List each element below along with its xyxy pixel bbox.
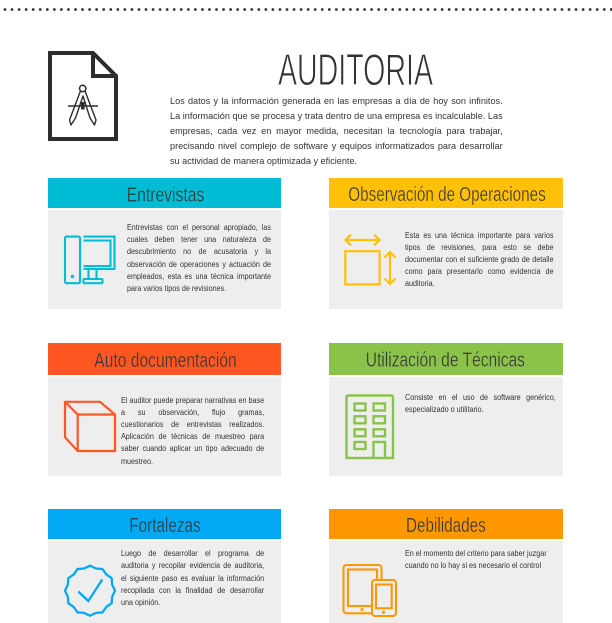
panel: Utilización de Técnicas <box>329 343 563 476</box>
intro text: precisando nivel complejo de software y equipos informatizados para desarrollar <box>170 141 503 152</box>
icon: desktop computer <box>64 236 116 284</box>
body: Utilización de Técnicas <box>329 377 563 476</box>
intro text: Los datos y la información generada en las empresas a día de hoy son infinitos. <box>170 96 503 107</box>
icon: document with compass <box>48 51 118 141</box>
panel: Auto documentación <box>48 343 281 476</box>
text: Utilización de Técnicas <box>404 393 556 414</box>
icon: tablet and phone <box>342 564 398 617</box>
heading: Debilidades <box>329 509 563 539</box>
text: Debilidades <box>404 549 547 570</box>
body: Entrevistas <box>48 210 281 309</box>
heading: Entrevistas <box>48 178 281 208</box>
text: Entrevistas <box>127 223 271 293</box>
dotted top border <box>4 8 612 11</box>
heading: Auto documentación <box>48 343 281 375</box>
icon: dimensions square <box>344 234 396 286</box>
text: Fortalezas: el siguiente paso es evaluar la información <box>121 574 264 583</box>
panel: Entrevistas <box>48 178 281 309</box>
body: Observación de Operaciones <box>329 210 563 309</box>
text: Fortalezas <box>121 549 264 607</box>
panel: Observación de Operaciones <box>329 178 563 309</box>
text: Debilidades: En el momento del criterio para saber juzgar <box>404 549 546 558</box>
body: Debilidades <box>329 541 563 623</box>
text: Fortalezas: una opinión. <box>121 598 160 607</box>
text: Observación de Operaciones: Esta es una técnica importante para varios <box>404 230 553 240</box>
text: Entrevistas: Entrevistas con el personal apropiado, las <box>127 223 271 232</box>
text: Observación de Operaciones: tipos de revisiones, para esto se debe <box>404 243 553 252</box>
intro text: empresas, cada vez en mayor medida, necesitan la tecnología para trabajar, <box>170 126 503 137</box>
heading: Fortalezas: Fortalezas <box>129 514 201 537</box>
panel: Debilidades <box>329 509 563 623</box>
text: Entrevistas: descubrimiento no de acusatoria y la <box>127 247 271 256</box>
heading: Utilización de Técnicas <box>329 343 563 375</box>
text: Entrevistas: para varios tipos de revisiones. <box>127 284 226 293</box>
icon: building <box>345 394 394 460</box>
panel: Fortalezas <box>48 509 281 623</box>
heading: Entrevistas: Entrevistas <box>127 184 204 207</box>
text: Observación de Operaciones <box>404 230 554 288</box>
text: Utilización de Técnicas: especializado o utilitario. <box>404 405 483 414</box>
text: Auto documentación: cuestionarios de entrevistas realizados. <box>120 420 264 429</box>
body: Auto documentación <box>48 377 281 476</box>
text: Observación de Operaciones: como para presentarlo como evidencia de <box>404 267 553 276</box>
text: Auto documentación: saber cuando aplicar un tipo adecuado de <box>120 444 264 453</box>
body: Fortalezas <box>48 541 281 623</box>
text: Fortalezas: recopilada con la finalidad de desarrollar <box>121 586 264 595</box>
heading: Fortalezas <box>48 509 281 539</box>
heading: Auto documentación: Auto documentación <box>94 349 237 372</box>
text: Auto documentación: El auditor puede preparar narrativas en base <box>120 396 264 404</box>
intro text: su actividad de manera optimizada y eficiente. <box>170 156 357 167</box>
text: Entrevistas: cuales deben tener una naturaleza de <box>127 235 271 244</box>
text: Observación de Operaciones: auditoria. <box>404 279 434 288</box>
text: Debilidades: cuando no lo hay si es necesario el control <box>404 561 541 570</box>
text: Entrevistas: empleados, esta es una técnica importante <box>127 272 271 281</box>
text: Fortalezas: auditoria y recopilar evidencia de auditoria, <box>121 561 264 570</box>
text: Auto documentación: a su observación, flujo gramas, <box>120 408 264 417</box>
heading: Debilidades: Debilidades <box>406 514 486 537</box>
text: Utilización de Técnicas: Consiste en el uso de software genérico, <box>404 393 555 402</box>
icon: check badge <box>64 564 116 617</box>
text: Auto documentación <box>120 396 264 466</box>
text: Entrevistas: observación de operaciones y actuación de <box>127 260 271 269</box>
text: Fortalezas: Luego de desarrollar el programa de <box>121 549 264 558</box>
text: Auto documentación: muestreo. <box>120 457 153 466</box>
text: Auto documentación: Aplicación de técnicas de muestreo para <box>120 432 264 441</box>
text: Observación de Operaciones: documentar con el suficiente grado de detalle <box>404 255 553 264</box>
intro text <box>170 96 503 167</box>
icon: cube <box>64 400 116 452</box>
intro text: La información que se procesa y trata dentro de una empresa es incalculable. Las <box>170 111 503 122</box>
